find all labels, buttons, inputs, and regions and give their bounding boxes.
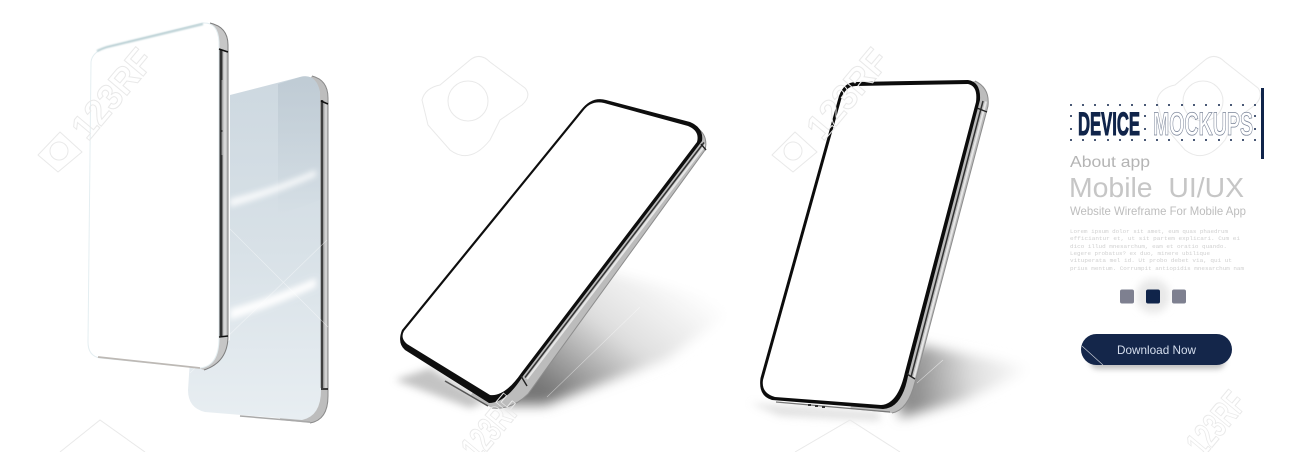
download button: Download Now	[1117, 343, 1196, 357]
subheading: website wireframe: Website Wireframe For Mobile App	[1070, 204, 1246, 218]
body paragraph: vituperata mel id. Ut probo debet via, qui ut	[1070, 257, 1232, 264]
body paragraph: Legere probatus? ex duo, minere ubilique	[1070, 250, 1210, 257]
phone: tilted left	[400, 99, 706, 408]
title: device mockups	[1070, 88, 1264, 159]
phone: upright tilted right	[760, 80, 988, 413]
body paragraph: prius mentum. Corrumpit antiopidis mnesarchum nam	[1070, 265, 1245, 272]
dotted frame	[1070, 104, 1256, 141]
phone: upright tilted shadow	[750, 345, 1035, 421]
pagination squares	[1120, 279, 1186, 313]
watermark stamps: 123RF	[798, 40, 897, 147]
body paragraph	[1070, 228, 1245, 272]
phone: rear view back panel	[188, 76, 328, 423]
download button	[1081, 334, 1232, 369]
body paragraph: efficiantur et, ut sit partem explicari. Cum ei	[1070, 235, 1241, 242]
accent bar	[1261, 88, 1264, 159]
phone: tilted landscape shadow	[395, 270, 740, 408]
phone: front view floating	[88, 23, 228, 370]
watermark stamps: 123RF	[63, 40, 162, 147]
body paragraph: Lorem ipsum dolor sit amet, eum quas phaedrum	[1070, 228, 1229, 235]
word: device: DEVICE	[1078, 106, 1140, 142]
heading: mobile ui/ux: Mobile UI/UX	[1069, 172, 1244, 203]
subtitle: about app: About app	[1070, 154, 1150, 171]
body paragraph: dico illud mnesarchum, eam et oratio quando.	[1070, 243, 1227, 250]
